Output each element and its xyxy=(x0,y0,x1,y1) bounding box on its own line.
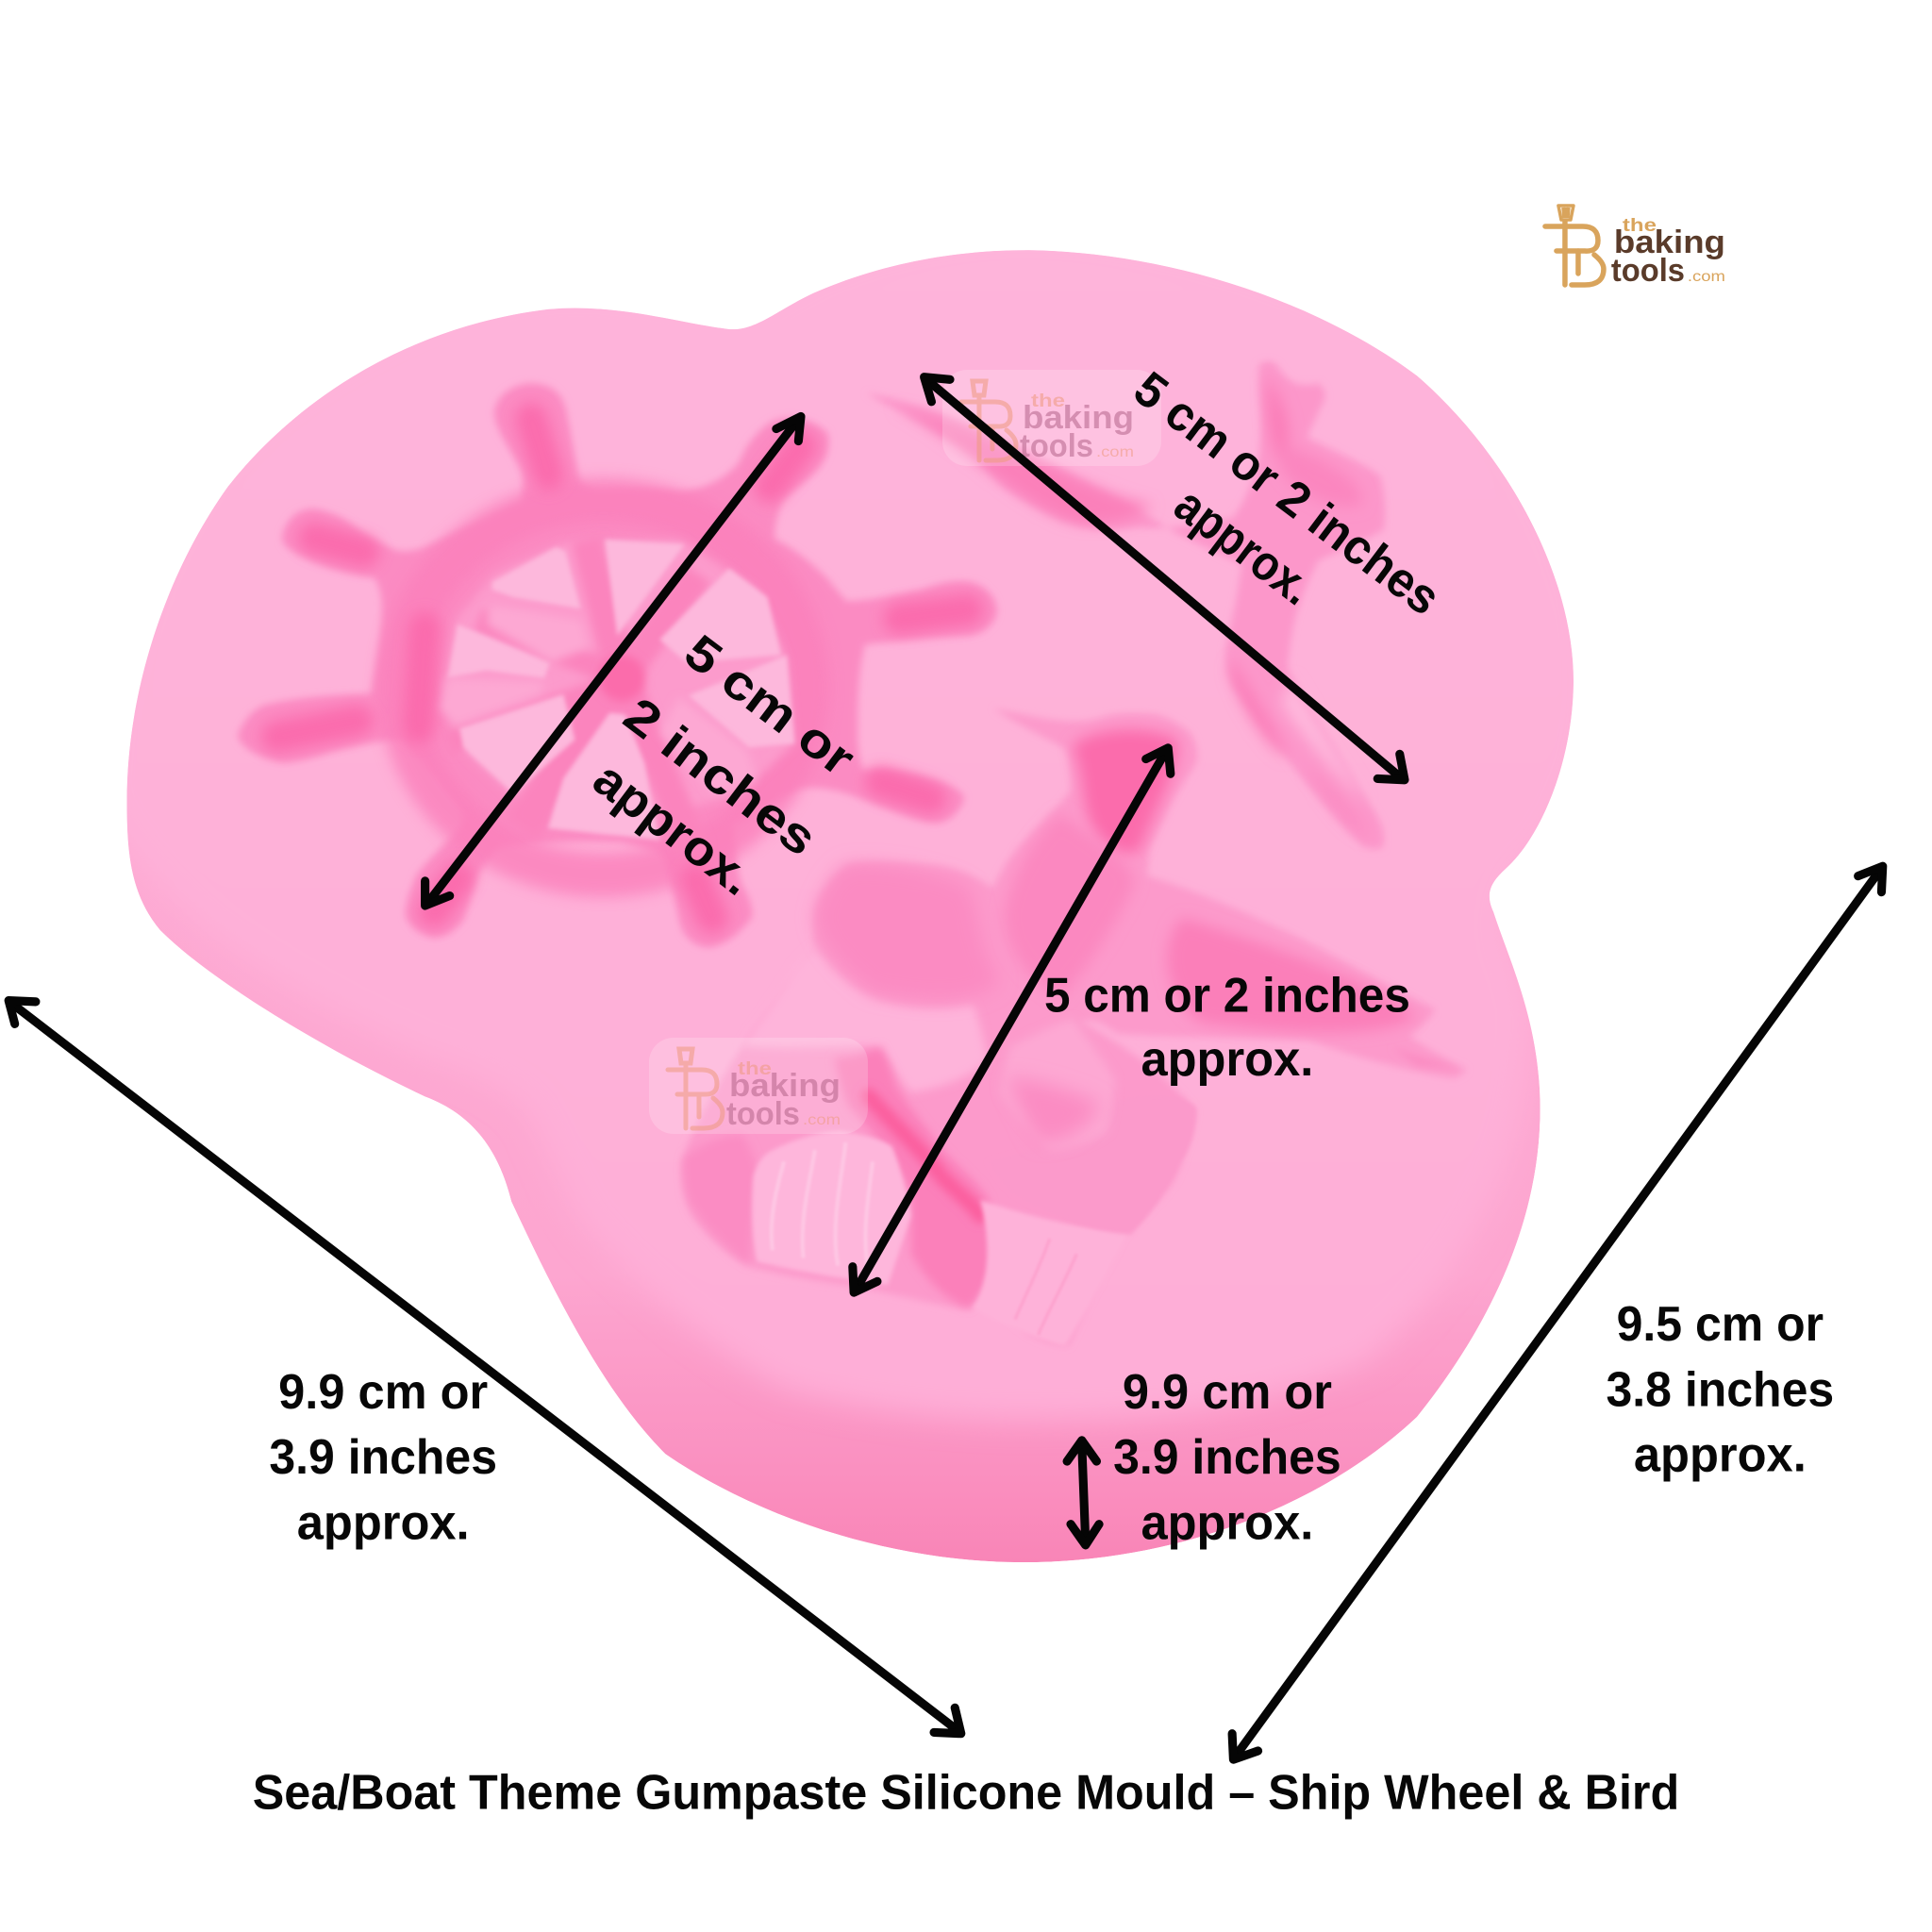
label: lower bird size xyxy=(1044,968,1410,1087)
label: width left: 3.9 inches xyxy=(269,1430,497,1485)
silicone mould xyxy=(98,225,1598,1562)
label: upper bird size: 5 cm or 2 inches xyxy=(1124,361,1450,626)
watermark: lower: baking xyxy=(729,1068,841,1104)
upper bird deep shading xyxy=(911,386,1360,791)
watermark: upper: baking xyxy=(1023,400,1134,436)
right lower shell xyxy=(988,1095,1196,1235)
label: width left: approx. xyxy=(297,1495,470,1550)
label: width left: 9.9 cm or xyxy=(278,1365,488,1420)
logo: the baking tools: tools xyxy=(1611,253,1685,289)
bird body shading xyxy=(1004,813,1134,998)
label: ship wheel size: 2 inches xyxy=(613,688,826,867)
label: ship wheel size: approx. xyxy=(583,752,763,907)
light strip xyxy=(741,946,988,1092)
left cavity wall xyxy=(684,1135,758,1266)
label: lower bird size: approx. xyxy=(1141,1032,1313,1087)
arrow: mould depth xyxy=(1067,1441,1099,1545)
label: width right: approx. xyxy=(1634,1428,1807,1483)
watermark: lower: .com xyxy=(803,1112,841,1128)
arrow: lower bird length xyxy=(853,748,1171,1292)
right upper shell xyxy=(1000,1019,1115,1150)
label: width right: 3.8 inches xyxy=(1607,1362,1834,1417)
watermark: upper: .com xyxy=(1096,444,1134,460)
watermark: upper xyxy=(942,370,1161,466)
wheel silhouette with handles xyxy=(238,383,997,947)
label: width right xyxy=(1607,1297,1834,1483)
label: width left xyxy=(269,1365,497,1550)
lower bird and anchor cavity xyxy=(682,708,1466,1346)
upper bird cavity xyxy=(866,361,1385,849)
left anchor fluke xyxy=(752,1131,911,1285)
fluke ridges xyxy=(772,1142,873,1274)
arrow: mould width right xyxy=(1232,866,1883,1759)
spatula head xyxy=(1558,206,1574,220)
label: depth: 9.9 cm or xyxy=(1123,1365,1332,1420)
deep fold xyxy=(834,1046,992,1307)
ship wheel cavity xyxy=(238,383,997,947)
title: Sea/Boat Theme Gumpaste Silicone Mould – Ship Wheel & Bird xyxy=(253,1765,1679,1820)
bird tail shading xyxy=(1167,918,1417,1033)
label: depth: 3.9 inches xyxy=(1113,1430,1341,1485)
label: lower bird size: 5 cm or 2 inches xyxy=(1044,968,1410,1023)
label: ship wheel size: 5 cm or xyxy=(675,625,864,787)
arrow: upper bird length xyxy=(924,377,1405,780)
watermark: lower xyxy=(649,1038,868,1134)
mould side wall xyxy=(127,250,1574,1562)
label: width right: 9.5 cm or xyxy=(1617,1297,1824,1352)
head shading xyxy=(1072,729,1177,854)
wheel ring deeper shade xyxy=(400,500,808,874)
right anchor fluke xyxy=(973,1200,1130,1346)
arrow: ship wheel diameter xyxy=(425,416,801,906)
label: depth: approx. xyxy=(1141,1495,1313,1550)
handle deep shading xyxy=(277,419,967,918)
label: ship wheel size xyxy=(583,625,864,907)
logo: the baking tools: the xyxy=(1623,216,1657,236)
logo: the baking tools xyxy=(1545,206,1725,289)
panels xyxy=(448,540,794,840)
label: depth xyxy=(1113,1365,1341,1550)
label: upper bird size: approx. xyxy=(1164,477,1324,616)
arrow: mould width left xyxy=(8,1001,961,1734)
mould top face xyxy=(98,225,1598,1420)
wheel interior panels xyxy=(441,540,794,852)
scallop shell xyxy=(815,864,1000,1000)
watermark: lower: the xyxy=(738,1059,772,1079)
watermark: upper: the xyxy=(1031,391,1065,411)
watermark: upper: tools xyxy=(1020,428,1093,464)
logo: the baking tools: baking xyxy=(1614,225,1725,260)
anchor and rope details xyxy=(684,864,1196,1346)
watermark: lower: tools xyxy=(726,1096,800,1132)
logo: the baking tools: .com xyxy=(1688,269,1725,285)
